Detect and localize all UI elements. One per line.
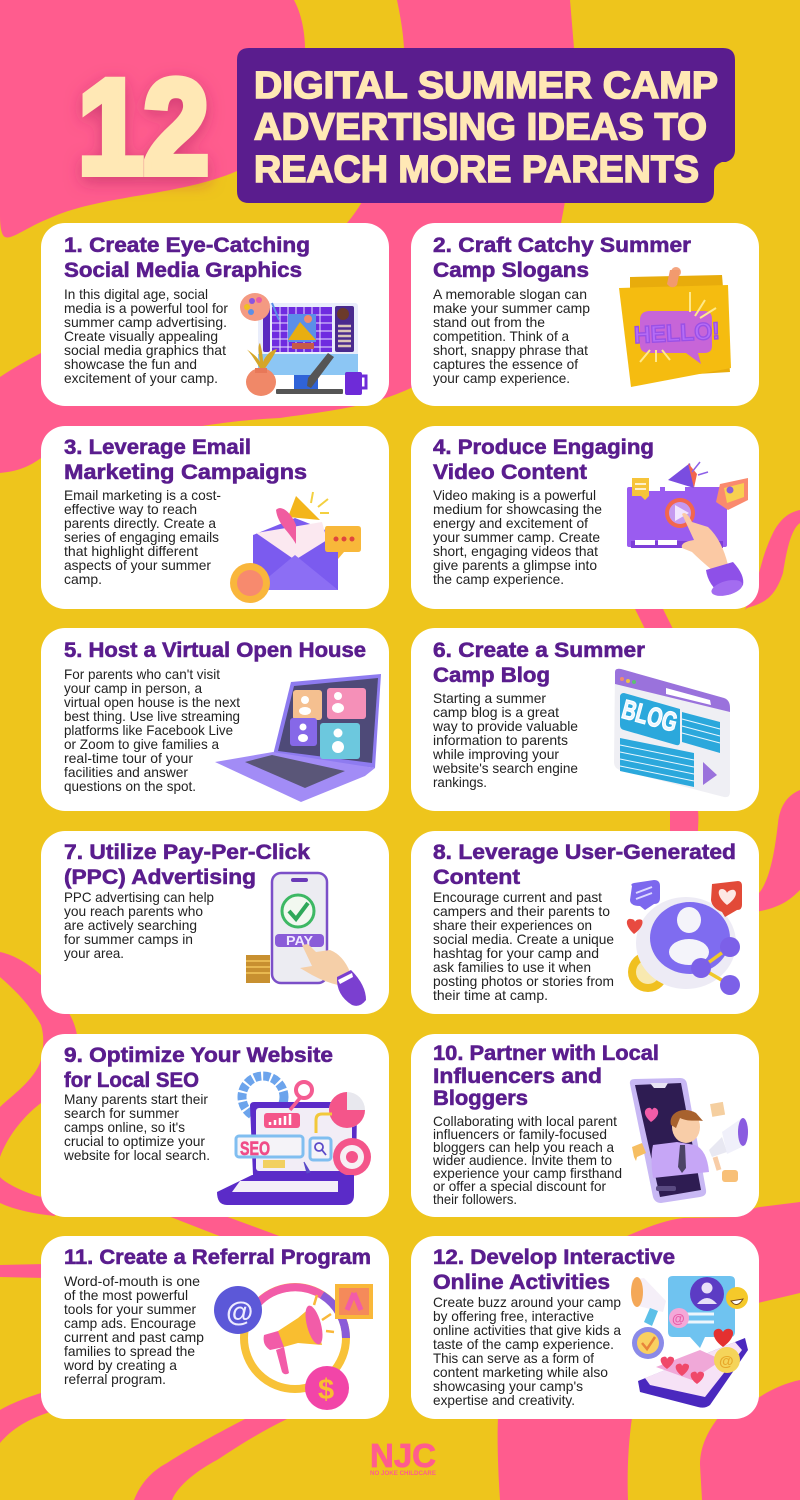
body text 2: short, snappy phrase that [433, 342, 588, 358]
body text 11: current and past camp [64, 1329, 204, 1345]
body text 1: showcase the fun and [64, 356, 197, 372]
title banner: ADVERTISING IDEAS TO [254, 106, 707, 148]
body text 4: the camp experience. [433, 571, 564, 587]
body text 11 [63, 1273, 204, 1387]
panel: card 9 [41, 1034, 389, 1217]
body text 5: virtual open house is the next [64, 694, 240, 710]
body text 9: Many parents start their [64, 1091, 208, 1107]
body text 7: you reach parents who [64, 903, 203, 919]
heading 9: for Local SEO [64, 1068, 199, 1092]
panel: card 8 [411, 831, 759, 1014]
heading 10: Influencers and [433, 1064, 602, 1088]
body text 10: bloggers can help you reach a [433, 1139, 614, 1155]
panel: card 4 [411, 426, 759, 609]
heading 11: 11. Create a Referral Program [64, 1245, 371, 1269]
body text 6: camp blog is a great [433, 704, 559, 720]
panel: card 2 [411, 223, 759, 406]
panel: card 5 [41, 628, 389, 811]
body text 1: Create visually appealing [64, 328, 218, 344]
heading 9 [64, 1043, 333, 1092]
icon: referral megaphone ring: $ [318, 1374, 334, 1406]
body text 2: stand out from the [433, 314, 545, 330]
body text 10: their followers. [433, 1191, 517, 1207]
body text 3: that highlight different [64, 543, 198, 559]
heading 8: Content [433, 865, 520, 889]
body text 10: Collaborating with local parent [433, 1113, 617, 1129]
icon: blog web page: BLOG [619, 694, 681, 738]
body text 7: PPC advertising can help [64, 889, 214, 905]
body text 11: tools for your summer [64, 1301, 196, 1317]
heading 3: 3. Leverage Email [64, 435, 251, 459]
heading 12 [433, 1245, 675, 1294]
body text 8: posting photos or stories from [433, 973, 614, 989]
heading 7: 7. Utilize Pay-Per-Click [64, 840, 310, 864]
body text 12: expertise and creativity. [433, 1392, 575, 1408]
icon: influencer on phone [630, 1078, 748, 1203]
body text 8 [433, 889, 614, 1003]
body text 3: parents directly. Create a [64, 515, 216, 531]
body text 8: share their experiences on [433, 917, 592, 933]
icon: design monitor [240, 293, 366, 396]
body text 8: their time at camp. [433, 987, 548, 1003]
icon: laptop with video tiles [215, 674, 381, 802]
heading 12: Online Activities [433, 1270, 610, 1294]
icon: referral megaphone ring [214, 1284, 373, 1410]
body text 3: series of engaging emails [64, 529, 219, 545]
body text 12: This can serve as a form of [433, 1350, 594, 1366]
body text 8: ask families to use it when [433, 959, 591, 975]
body text 1: excitement of your camp. [64, 370, 218, 386]
body text 2: captures the essence of [433, 356, 578, 372]
body text 3 [64, 487, 221, 587]
body text 12: showcasing your camp's [433, 1378, 583, 1394]
icon: blog web page [614, 669, 730, 797]
body text 8: campers and their parents to [433, 903, 610, 919]
body text 1: summer camp advertising. [64, 314, 227, 330]
body text 2: your camp experience. [433, 370, 570, 386]
body text 12: online activities that give kids a [433, 1322, 621, 1338]
body text 8: hashtag for your camp and [433, 945, 599, 961]
heading 6 [433, 638, 646, 687]
icon: SEO laptop [217, 1076, 371, 1205]
body text 8: social media. Create a unique [433, 931, 614, 947]
body text 6 [432, 690, 578, 790]
panel: card 1 [41, 223, 389, 406]
body text 10: influencers or family-focused [433, 1126, 607, 1142]
panel: card 3 [41, 426, 389, 609]
icon: phone with pay button: PAY [286, 934, 314, 948]
heading 2: Camp Slogans [433, 258, 589, 282]
heading 8: 8. Leverage User-Generated [433, 840, 736, 864]
heading 7 [64, 840, 310, 889]
heading 9: 9. Optimize Your Website [64, 1043, 333, 1067]
body text 5: your camp in person, a [64, 680, 202, 696]
heading 2: 2. Craft Catchy Summer [433, 233, 692, 257]
body text 12: content marketing while also [433, 1364, 608, 1380]
title banner: REACH MORE PARENTS [254, 149, 699, 191]
body text 7: your area. [64, 945, 124, 961]
body text 5: questions on the spot. [64, 778, 196, 794]
body text 5: best thing. Use live streaming [64, 708, 240, 724]
body text 5: platforms like Facebook Live [64, 722, 233, 738]
body text 3: aspects of your summer [64, 557, 211, 573]
body text 11: word by creating a [63, 1357, 177, 1373]
body text 6: while improving your [432, 746, 559, 762]
heading 8 [433, 840, 736, 889]
body text 2: A memorable slogan can [433, 286, 587, 302]
body text 3: camp. [64, 571, 102, 587]
panel: card 12 [411, 1236, 759, 1419]
body text 9: search for summer [64, 1105, 179, 1121]
icon: hello sticky note [619, 267, 731, 387]
body text 2 [433, 286, 590, 386]
body text 4: energy and excitement of [433, 515, 588, 531]
body text 12: by offering free, interactive [433, 1308, 594, 1324]
title banner: DIGITAL SUMMER CAMP [254, 65, 718, 107]
body text 4: Video making is a powerful [433, 487, 596, 503]
body text 1: In this digital age, social [64, 286, 208, 302]
body text 7 [64, 889, 214, 961]
heading 6: 6. Create a Summer [433, 638, 646, 662]
logo: NJC: NO JOKE CHILDCARE [370, 1470, 437, 1477]
body text 12: Create buzz around your camp [433, 1294, 621, 1310]
body text 8: Encourage current and past [433, 889, 602, 905]
body text 11: referral program. [64, 1371, 166, 1387]
body text 2: competition. Think of a [433, 328, 569, 344]
body text 5 [64, 666, 240, 794]
icon: video player with hand [627, 462, 748, 599]
body text 4: short, engaging videos that [433, 543, 598, 559]
body text 5: real-time tour of your [64, 750, 193, 766]
body text 6: rankings. [433, 774, 487, 790]
heading 6: Camp Blog [433, 663, 550, 687]
body text 6: way to provide valuable [432, 718, 578, 734]
body text 5: or Zoom to give families a [64, 736, 219, 752]
body text 9: website for local search. [63, 1147, 210, 1163]
heading 4: Video Content [433, 460, 587, 484]
heading 1 [64, 233, 310, 282]
body text 6: Starting a summer [433, 690, 546, 706]
icon: interactive phone and chat: @ [672, 1311, 685, 1326]
body text 12 [433, 1294, 621, 1408]
icon: referral megaphone ring: @ [226, 1296, 253, 1327]
body text 10: or offer a special discount for [433, 1178, 606, 1194]
body text 4: your summer camp. Create [433, 529, 600, 545]
body text 10: experience your camp firsthand [433, 1165, 622, 1181]
heading 10: 10. Partner with Local [433, 1041, 659, 1065]
body text 4: medium for showcasing the [433, 501, 602, 517]
heading 4: 4. Produce Engaging [433, 435, 654, 459]
icon: email envelope with megaphone [230, 492, 361, 603]
body text 12: taste of the camp experience. [433, 1336, 614, 1352]
panel: card 10 [411, 1034, 759, 1217]
body text 11: Word-of-mouth is one [64, 1273, 200, 1289]
panel: card 6 [411, 628, 759, 811]
body text 9: camps online, so it's [64, 1119, 185, 1135]
body text 3: Email marketing is a cost- [64, 487, 221, 503]
body text 5: facilities and answer [64, 764, 188, 780]
body text 5: For parents who can't visit [64, 666, 220, 682]
icon: hello sticky note: HELLO! [633, 318, 721, 349]
heading 2 [433, 233, 692, 282]
body text 10: wider audience. Invite them to [432, 1152, 612, 1168]
heading 3 [64, 435, 307, 484]
heading 1: Social Media Graphics [64, 258, 302, 282]
title banner [237, 48, 735, 203]
icon: interactive phone and chat [631, 1276, 748, 1408]
body text 9: crucial to optimize your [64, 1133, 205, 1149]
body text 9 [63, 1091, 210, 1163]
body text 4: give parents a glimpse into [433, 557, 597, 573]
icon: phone with pay button [246, 873, 366, 1006]
icon: SEO laptop: SEO [240, 1139, 270, 1160]
body text 6: information to parents [433, 732, 568, 748]
body text 2: make your summer camp [433, 300, 590, 316]
body text 3: effective way to reach [64, 501, 197, 517]
body text 1: media is a powerful tool for [64, 300, 228, 316]
heading 10: Bloggers [433, 1086, 528, 1110]
big number 12: 12 [78, 53, 209, 202]
heading 7: (PPC) Advertising [64, 865, 256, 889]
logo: NJC: NJC [370, 1437, 436, 1474]
body text 1: social media graphics that [64, 342, 226, 358]
heading 12: 12. Develop Interactive [433, 1245, 675, 1269]
heading 3: Marketing Campaigns [64, 460, 307, 484]
body text 11: camp ads. Encourage [64, 1315, 196, 1331]
body text 10 [432, 1113, 622, 1207]
body text 4 [433, 487, 602, 587]
body text 6: website's search engine [432, 760, 578, 776]
body text 11: of the most powerful [64, 1287, 188, 1303]
panel: card 11 [41, 1236, 389, 1419]
body text 11: families to spread the [64, 1343, 195, 1359]
icon: user network [627, 880, 742, 995]
panel: card 7 [41, 831, 389, 1014]
heading 4 [433, 435, 654, 484]
heading 10 [433, 1041, 659, 1110]
icon: interactive phone and chat: @ [719, 1353, 734, 1370]
body text 7: for summer camps in [64, 931, 193, 947]
heading 1: 1. Create Eye-Catching [64, 233, 310, 257]
heading 5: 5. Host a Virtual Open House [64, 638, 366, 662]
body text 7: are actively searching [64, 917, 197, 933]
body text 1 [64, 286, 228, 386]
